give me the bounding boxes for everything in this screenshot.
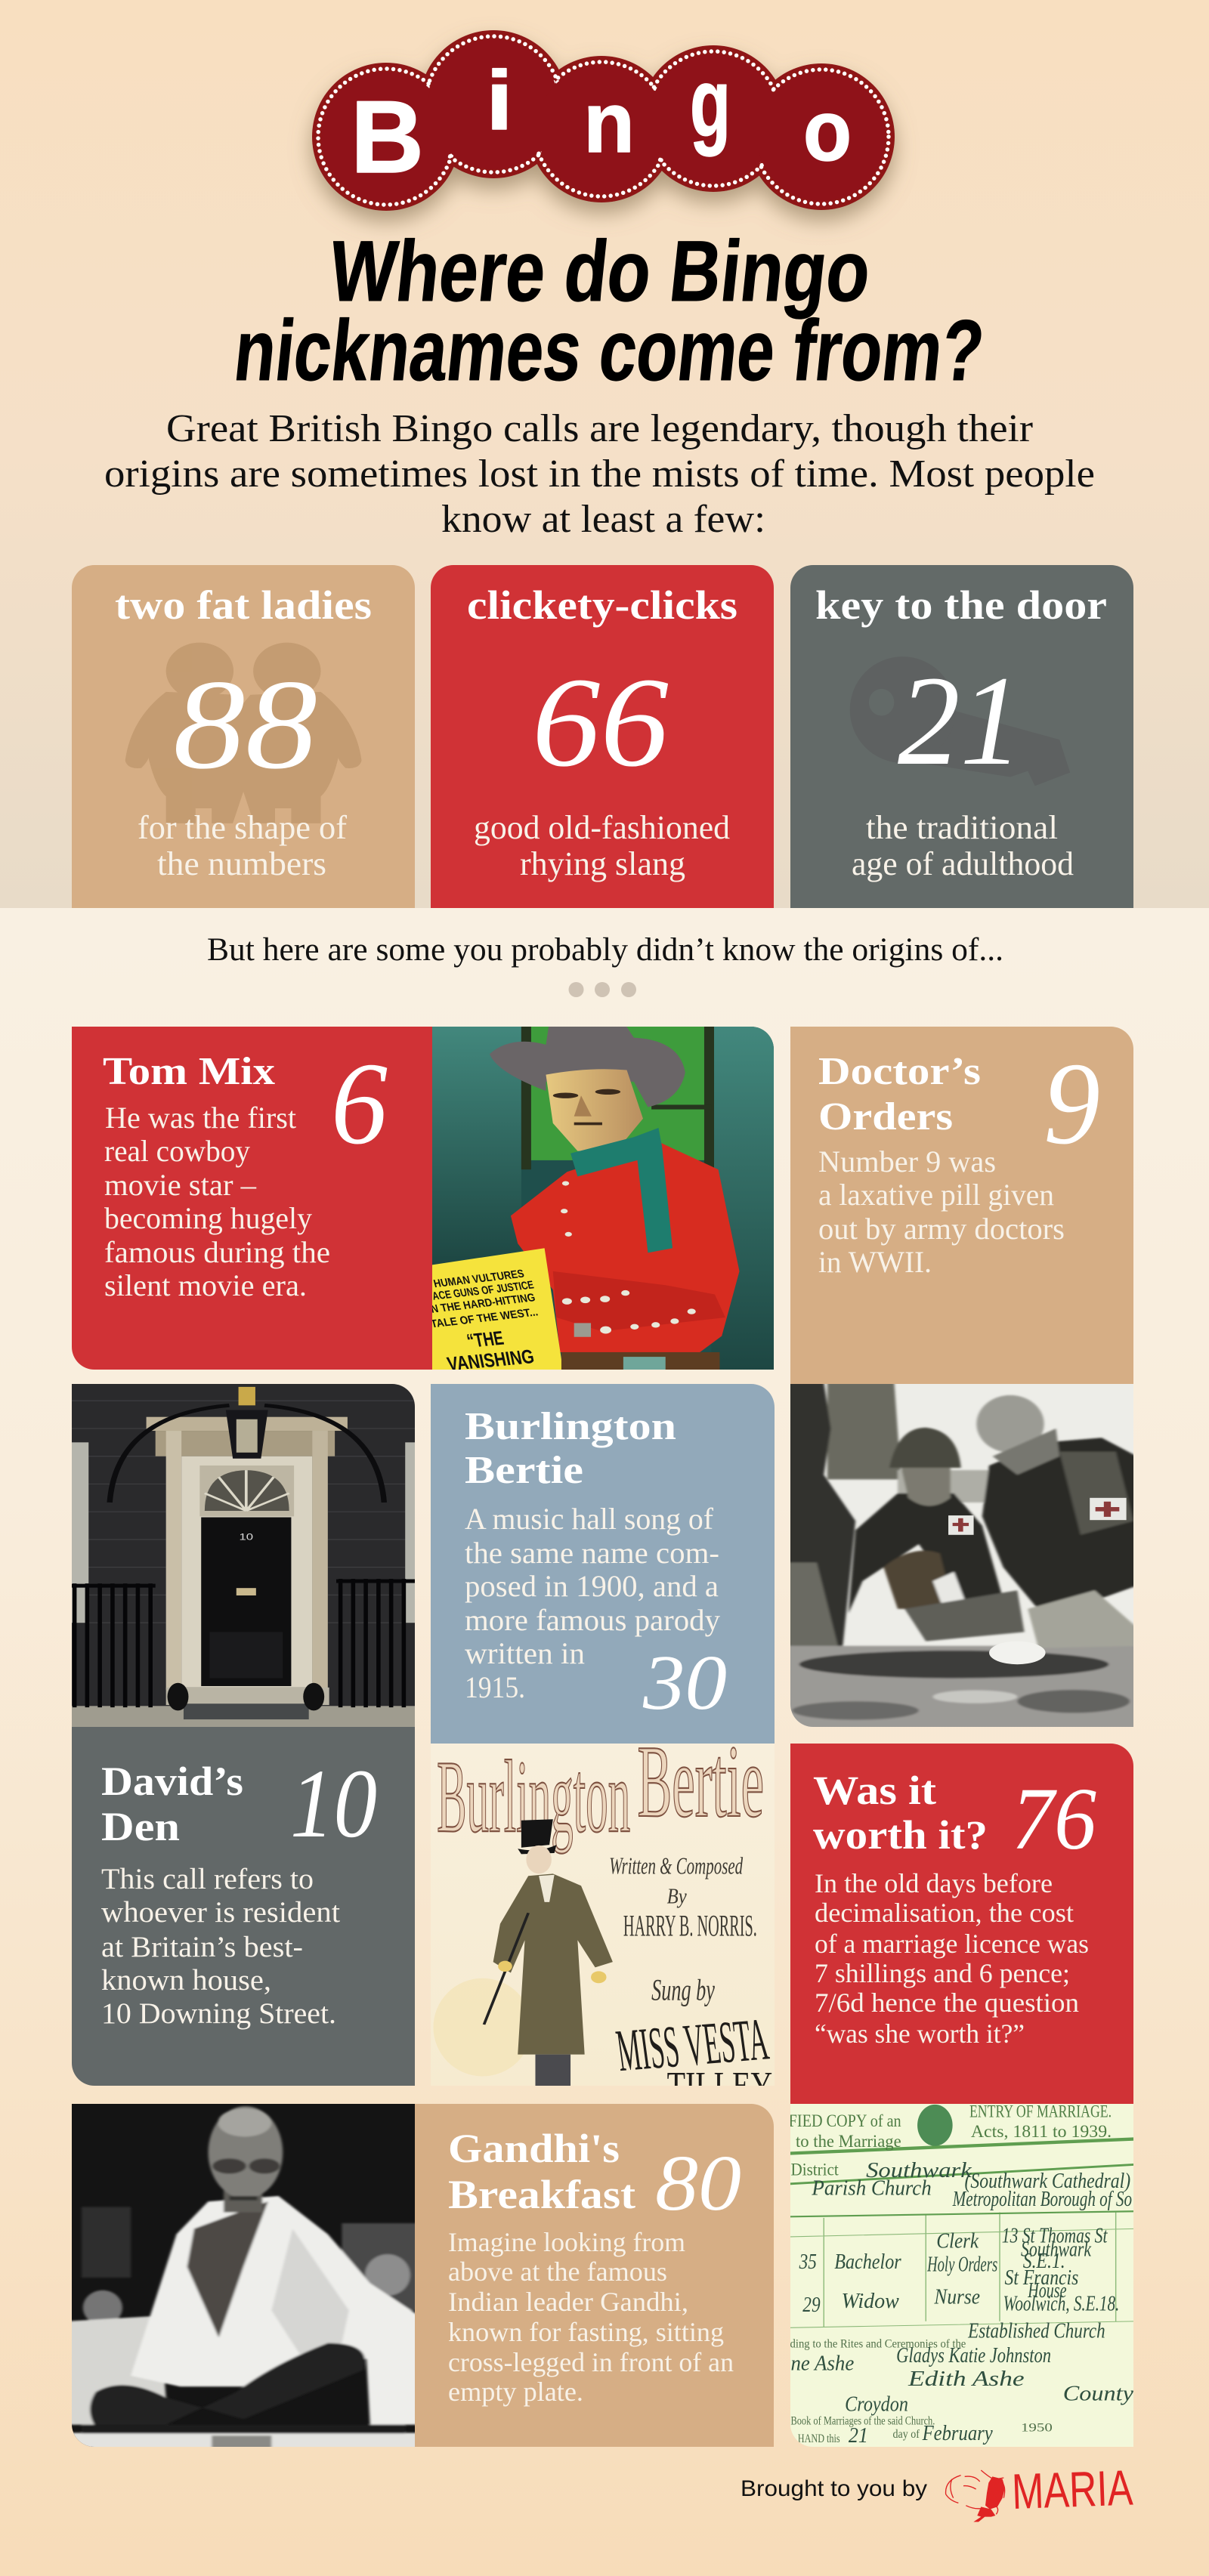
body text: more famous parody <box>465 1603 720 1637</box>
caption: age of adulthood <box>852 845 1074 882</box>
photo: marriage certificate: 21 <box>849 2423 868 2448</box>
number: 9 <box>1044 1038 1100 1169</box>
panel: Was it worth it? 76 <box>790 1744 1133 2104</box>
photo: marriage certificate: ENTRY OF MARRIAGE. <box>969 2102 1112 2121</box>
yellow poster with text <box>426 1248 564 1373</box>
heading: Orders <box>818 1095 953 1138</box>
shawl <box>131 2196 419 2425</box>
photo: marriage certificate: Woolwich, S.E.18. <box>1003 2291 1119 2315</box>
body text: 7/6d hence the question <box>815 1988 1079 2018</box>
body text: This call refers to <box>101 1863 314 1895</box>
photo: marriage certificate: Book of Marriages of the said Church. <box>790 2414 935 2427</box>
photo: marriage certificate: District <box>790 2160 839 2179</box>
wordmark: MARIA <box>1011 2459 1133 2519</box>
body text: known for fasting, sitting <box>448 2317 724 2347</box>
body text: cross-legged in front of an <box>448 2347 734 2377</box>
poster lettering: By <box>667 1884 687 1908</box>
face <box>546 1069 643 1151</box>
photo: marriage certificate: Southwark <box>866 2158 972 2182</box>
panel: two fat ladies 88 <box>72 565 415 908</box>
text: Bertie <box>638 1725 764 1839</box>
body text: empty plate. <box>448 2377 583 2407</box>
panel: David's Den 10 <box>72 1727 415 2086</box>
poster lettering: Written & Composed <box>609 1852 744 1879</box>
panel: Tom Mix 6 <box>72 1027 432 1370</box>
body text: Imagine looking from <box>448 2227 685 2257</box>
badge: Bingo logo: B <box>351 79 424 194</box>
intro text: know at least a few: <box>441 498 765 541</box>
text: MISS VESTA <box>613 2005 772 2083</box>
photo: marriage certificate: House <box>1028 2278 1067 2303</box>
legs <box>90 2343 365 2435</box>
lantern <box>226 1410 268 1459</box>
badge: Bingo logo: g <box>690 49 731 157</box>
seal <box>917 2105 953 2146</box>
caption: good old-fashioned <box>474 809 730 846</box>
armbands <box>1090 1498 1127 1520</box>
photo: marriage certificate: Edith Ashe <box>908 2367 1025 2391</box>
photo: marriage certificate: ne Ashe <box>790 2352 854 2376</box>
body text: In the old days before <box>815 1868 1053 1898</box>
body text: silent movie era. <box>104 1268 307 1302</box>
heading: Was it <box>813 1768 936 1813</box>
panel: Doctor's Orders 9 <box>790 1027 1133 1384</box>
body text: out by army doctors <box>818 1212 1065 1246</box>
number: 21 <box>898 650 1022 792</box>
body text <box>818 1144 1065 1279</box>
body text: above at the famous <box>448 2256 667 2287</box>
centre medic <box>849 1493 1003 1623</box>
photo: marriage certificate: Croydon <box>845 2392 908 2417</box>
photo: marriage certificate: Southwark <box>1021 2237 1092 2261</box>
number: 10 <box>290 1750 377 1858</box>
photo: Tom Mix movie poster: TALE OF THE WEST... <box>429 1306 540 1330</box>
body text: known house, <box>101 1964 271 1997</box>
photo: marriage certificate: Clerk <box>936 2229 979 2253</box>
body text: “was she worth it?” <box>815 2018 1025 2049</box>
photo: marriage certificate: Established Church <box>967 2318 1105 2343</box>
body text: of a marriage licence was <box>815 1929 1089 1959</box>
photo: soldiers treating a casualty <box>785 1382 1137 1729</box>
poster lettering <box>609 1852 772 2107</box>
body text <box>815 1868 1089 2049</box>
heading: two fat ladies <box>115 582 372 628</box>
photo: 10 Downing Street door <box>67 1382 419 1729</box>
photo: Burlington Bertie sheet music <box>431 1744 775 2086</box>
photo: marriage certificate: S.E.1. <box>1023 2249 1065 2273</box>
coat <box>493 1873 613 2055</box>
photo: Tom Mix movie poster: “THE <box>465 1327 506 1352</box>
photo: marriage certificate: Widow <box>842 2289 899 2313</box>
photo: marriage certificate <box>785 2101 1137 2449</box>
photo: Tom Mix movie poster: HUMAN VULTURES <box>432 1268 526 1290</box>
body text: 7 shillings and 6 pence; <box>815 1958 1070 1988</box>
shirt <box>511 1141 740 1357</box>
intro text: origins are sometimes lost in the mists of time. Most people <box>104 452 1095 496</box>
casualty <box>883 1551 954 1609</box>
logo: Maria <box>946 2459 1133 2522</box>
background: upper section <box>0 0 1209 908</box>
text: HARRY B. NORRIS. <box>623 1909 757 1943</box>
belt <box>561 1352 719 1370</box>
number: 76 <box>1012 1769 1096 1868</box>
heading: Burlington <box>465 1405 676 1448</box>
photo: marriage certificate: County <box>1063 2381 1133 2405</box>
right medic <box>982 1438 1137 1618</box>
panel: Burlington Bertie 30 <box>431 1384 775 1744</box>
body text: 1915. <box>465 1670 525 1704</box>
heading: Den <box>101 1804 180 1849</box>
steps and mat <box>166 1688 329 1705</box>
photo: Gandhi seated <box>67 2101 419 2449</box>
railings <box>67 1579 419 1707</box>
title: nicknames come from? <box>230 303 988 399</box>
three dots <box>568 982 636 997</box>
badge: Bingo logo: n <box>583 75 635 170</box>
windows <box>72 1442 88 1623</box>
heading: clickety-clicks <box>467 582 737 628</box>
caption <box>474 809 730 882</box>
heading: worth it? <box>813 1812 988 1858</box>
title: Where do Bingo <box>325 224 875 320</box>
fanlight <box>199 1466 294 1516</box>
photo: marriage certificate: FIED COPY of an <box>789 2111 901 2130</box>
photo: marriage certificate: day of <box>892 2427 920 2440</box>
heading: Bertie <box>465 1449 583 1492</box>
number: 6 <box>331 1038 388 1169</box>
photo: Tom Mix movie poster: N THE HARD-HITTING <box>429 1292 536 1316</box>
poster lettering: TILLEY <box>667 2064 772 2107</box>
body text: A music hall song of <box>465 1502 714 1536</box>
photo: marriage certificate: 13 St Thomas St <box>1002 2223 1108 2247</box>
icon: two ladies silhouette <box>125 643 362 823</box>
body text: He was the first <box>105 1101 296 1135</box>
photo: Tom Mix movie poster: VANISHING <box>445 1346 536 1376</box>
photo: marriage certificate: HAND this <box>798 2432 840 2445</box>
body text: movie star – <box>104 1168 257 1202</box>
icon: lion head <box>946 2470 1005 2522</box>
body text: famous during the <box>104 1235 330 1269</box>
chest <box>187 2201 268 2337</box>
caption: the numbers <box>157 845 326 882</box>
intro text: Great British Bingo calls are legendary, though their <box>166 407 1033 450</box>
head <box>526 1846 552 1873</box>
caption <box>138 809 347 882</box>
background: lower section <box>0 908 1209 2576</box>
number: 80 <box>655 2139 741 2227</box>
body text: the same name com- <box>465 1536 719 1570</box>
heading <box>448 2126 635 2217</box>
body text: real cowboy <box>104 1134 250 1168</box>
hat <box>490 1021 685 1107</box>
photo: marriage certificate: Nurse <box>934 2285 980 2309</box>
number: 88 <box>173 653 317 795</box>
photo: marriage certificate: 29 <box>802 2293 821 2317</box>
photo: marriage certificate: to the Marriage <box>796 2131 901 2151</box>
body text: becoming hugely <box>104 1201 312 1235</box>
body text <box>104 1101 330 1302</box>
poster lettering: Sung by <box>651 1973 715 2007</box>
top hat <box>518 1819 556 1854</box>
body text: a laxative pill given <box>818 1178 1054 1212</box>
badge: Bingo logo: o <box>803 83 852 178</box>
photo: marriage certificate: 1950 <box>1021 2421 1053 2434</box>
caption <box>852 809 1074 882</box>
panel: key to the door 21 <box>790 565 1133 908</box>
body text: whoever is resident <box>101 1896 340 1929</box>
title <box>230 224 988 399</box>
photo: marriage certificate: Holy Orders <box>927 2252 997 2276</box>
photo: marriage certificate: ding to the Rites and Ceremonies of the <box>790 2337 966 2350</box>
credit: brought to you by: Brought to you by <box>741 2476 927 2501</box>
heading <box>818 1050 981 1138</box>
caption: rhying slang <box>520 845 685 882</box>
neckerchief <box>570 1128 673 1252</box>
panel: Gandhi's Breakfast 80 <box>415 2104 774 2447</box>
badge: Bingo logo <box>312 30 895 211</box>
door frame <box>147 1417 348 1431</box>
photo: marriage certificate: Acts, 1811 to 1939. <box>971 2121 1112 2141</box>
body text: written in <box>465 1636 585 1670</box>
icon: key silhouette <box>850 656 1070 786</box>
body text <box>448 2227 734 2407</box>
photo: marriage certificate: St Francis <box>1005 2266 1078 2290</box>
photo: marriage certificate: 35 <box>799 2250 817 2274</box>
heading: Breakfast <box>448 2172 635 2217</box>
badge: Bingo logo: i <box>486 54 513 147</box>
body text: in WWII. <box>818 1245 932 1279</box>
photo: marriage certificate: Bachelor <box>834 2250 901 2274</box>
heading: Gandhi's <box>448 2126 620 2171</box>
photo: marriage certificate: February <box>922 2421 993 2445</box>
heading <box>101 1759 243 1849</box>
heading: Tom Mix <box>103 1050 275 1093</box>
body text: 10 Downing Street. <box>101 1997 336 2030</box>
photo: marriage certificate: Gladys Katie Johnston <box>896 2343 1051 2368</box>
photo: 10 Downing Street door: 10 <box>239 1532 253 1543</box>
panel: clickety-clicks 66 <box>431 565 774 908</box>
door <box>201 1518 291 1686</box>
body text: Indian leader Gandhi, <box>448 2287 688 2317</box>
body text: decimalisation, the cost <box>815 1898 1074 1928</box>
heading: David’s <box>101 1759 243 1804</box>
caption: for the shape of <box>138 809 347 846</box>
iron arch <box>110 1405 384 1503</box>
caption: the traditional <box>866 809 1058 846</box>
body text <box>465 1502 720 1704</box>
heading <box>813 1768 988 1858</box>
photo: Burlington Bertie sheet music: Burlington <box>437 1740 630 1854</box>
number: 30 <box>642 1639 727 1726</box>
subheading: But here are some you probably didn’t know the origins of... <box>207 932 1003 968</box>
body text: posed in 1900, and a <box>465 1569 719 1603</box>
photo: Tom Mix movie poster: ACE GUNS OF JUSTICE <box>431 1279 535 1303</box>
heading <box>465 1405 676 1492</box>
number: 66 <box>532 651 669 793</box>
heading: key to the door <box>815 582 1107 628</box>
photo: marriage certificate: Parish Church <box>812 2176 932 2200</box>
head <box>224 2179 262 2213</box>
body text: Number 9 was <box>818 1144 996 1178</box>
heading: Doctor’s <box>818 1050 981 1093</box>
body text: at Britain’s best- <box>101 1931 303 1963</box>
body text <box>101 1863 340 2030</box>
photo: Tom Mix movie poster <box>426 1021 778 1376</box>
intro text <box>104 407 1095 541</box>
